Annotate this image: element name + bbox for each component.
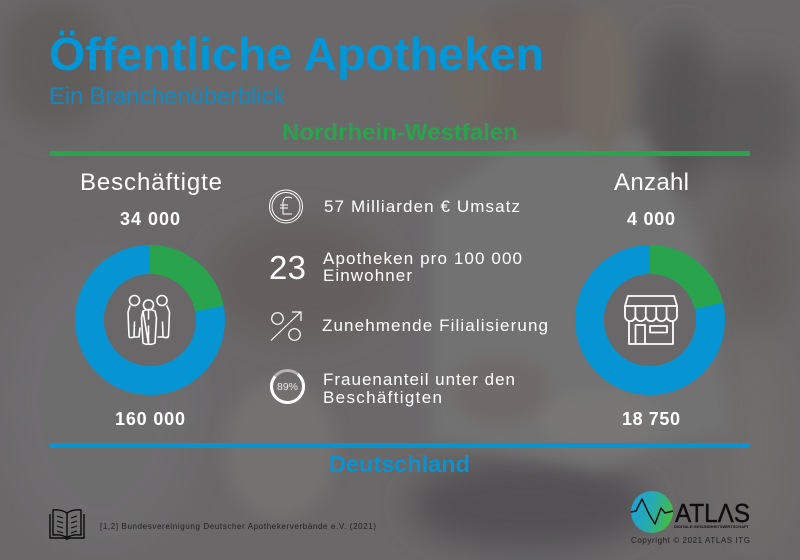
fact: share of women: Beschäftigten xyxy=(323,388,442,407)
fact: number 23: 23 xyxy=(269,249,306,286)
green divider xyxy=(50,151,750,156)
national heading: Deutschland: Deutschland xyxy=(329,451,470,477)
fact: branch networks: Zunehmende Filialisierung xyxy=(322,316,548,335)
logo: ATLAS: ATLΛS xyxy=(675,498,750,528)
fact: pharmacies per inhabitants xyxy=(323,249,522,285)
fact: share of women xyxy=(323,370,515,407)
fact: pharmacies per inhabitants: Einwohner xyxy=(323,266,412,285)
icon: percent with arrow xyxy=(271,312,301,340)
blue divider xyxy=(50,443,750,448)
icon: open book xyxy=(50,510,84,540)
icon: 89 percent ring xyxy=(265,364,310,409)
source citation: [1,2] Bundesvereinigung Deutscher Apothekerverbände e.V. (2021) xyxy=(100,522,376,531)
value: regional employees: 34 000 xyxy=(120,209,180,229)
icon: group of people xyxy=(128,296,170,344)
icon: euro coin xyxy=(270,190,302,223)
value: regional pharmacies: 4 000 xyxy=(627,209,675,229)
icon: 89 percent ring: 89% xyxy=(277,381,298,393)
logo: ATLAS xyxy=(631,491,750,533)
subtitle: Ein Branchenüberblick xyxy=(49,83,286,110)
icon: storefront xyxy=(625,296,677,344)
fact: pharmacies per inhabitants: Apotheken pro 100 000 xyxy=(323,249,522,268)
donut chart: employees xyxy=(90,245,224,380)
title: Öffentliche Apotheken xyxy=(49,28,544,80)
fact: share of women: Frauenanteil unter den xyxy=(323,370,515,389)
copyright: Copyright © 2021 ATLAS ITG xyxy=(631,536,750,545)
panel: Beschäftigte xyxy=(80,169,224,429)
value: national employees: 160 000 xyxy=(115,409,185,429)
panel: key facts xyxy=(265,190,548,409)
donut chart: pharmacies xyxy=(590,245,723,380)
heading: Anzahl: Anzahl xyxy=(614,169,689,196)
regional heading: Nordrhein-Westfalen: Nordrhein-Westfalen xyxy=(282,119,518,145)
fact: revenue: 57 Milliarden € Umsatz xyxy=(324,197,520,216)
heading: Beschäftigte: Beschäftigte xyxy=(80,169,222,196)
value: national pharmacies: 18 750 xyxy=(622,409,680,429)
panel: Anzahl xyxy=(590,169,723,429)
logo: ATLAS: DIGITALE GESUNDHEITSWIRTSCHAFT xyxy=(674,525,750,529)
